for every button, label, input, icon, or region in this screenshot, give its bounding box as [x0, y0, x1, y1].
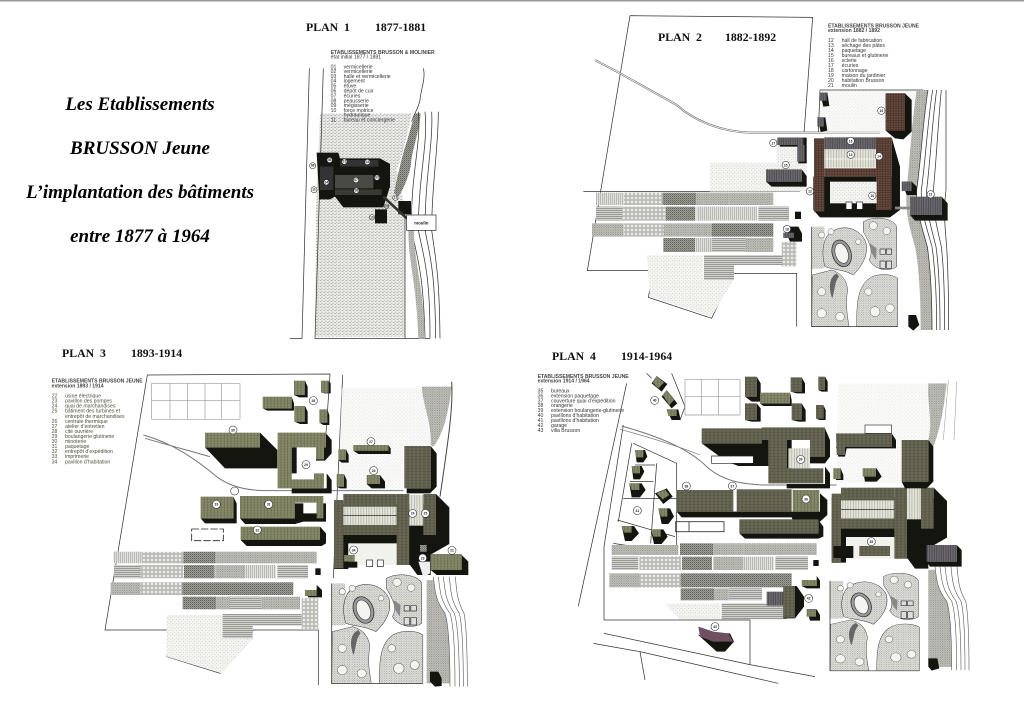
plan 3 buildings: [201, 381, 468, 687]
plan 2 legend: 14: [828, 48, 834, 54]
plan 4 housing pavilions: [622, 376, 681, 544]
plan 2 numbered markers: 21: [929, 193, 933, 197]
title: L’implantation des bâtiments: [25, 182, 254, 203]
plan 2 river and banks: [906, 90, 949, 330]
panel: plan 1 site map: [290, 50, 440, 338]
plan 3 main factory complex: [334, 494, 449, 575]
plan 4 numbered markers: 40: [653, 399, 657, 403]
plan 4 numbered markers: 38: [684, 484, 688, 488]
plan 4 numbered markers: 41: [635, 509, 639, 513]
plan 2 numbered markers: 12: [808, 190, 812, 194]
plan 3 legend: 34: [52, 459, 58, 465]
plan 4 legend: pavillons d’habitation: [551, 413, 599, 419]
plan 4 legend: 39: [538, 408, 544, 414]
plan 1 stippled ground: [315, 113, 412, 337]
plan 4 legend: extension 1914 / 1964: [538, 379, 590, 385]
plan 2 garden: [812, 218, 898, 327]
plan 4 main factory complex: [832, 488, 947, 569]
plan 2 legend: cartonnage: [842, 68, 868, 74]
plan 2 legend: 16: [828, 58, 834, 64]
plan 3 heading: PLAN 3: [62, 346, 106, 360]
plan 3 numbered markers: 26: [372, 469, 376, 473]
plan 4 south small shed: [928, 658, 939, 671]
plan 2 heading: PLAN 2: [658, 30, 702, 44]
panel: plan 4 site map: [538, 373, 969, 683]
plan 2 cultivated fields: [592, 193, 789, 280]
plan 1 heading: 1877-1881: [375, 20, 426, 34]
plan 2 legend: 21: [828, 83, 834, 89]
plan 4 heading: PLAN 4: [552, 349, 596, 363]
plan 1 numbered markers: 01: [342, 160, 346, 164]
plan 4 heading: [552, 349, 672, 363]
plan 1 legend: 05: [331, 84, 337, 90]
plan 4 stippled grounds: [665, 383, 933, 619]
plan 2 numbered markers: 14: [877, 155, 881, 159]
plan 4 numbered markers: 43: [713, 625, 717, 629]
plan 3 legend: pavillon d’habitation: [65, 459, 110, 465]
plan 1 legend: étuve: [344, 84, 356, 90]
plan 2 legend: scierie: [842, 58, 857, 64]
plan 2 numbered markers: 19: [879, 109, 883, 113]
plan 3 numbered markers: 22: [450, 549, 454, 553]
plan 4 legend: villa Brusson: [551, 428, 580, 434]
plan 1 legend: force motrice: [344, 108, 374, 114]
plan 1 heading: PLAN 1: [306, 20, 350, 34]
panel: plan 3 site map: [52, 374, 468, 687]
plan 1 legend: dépôt de cuir: [344, 89, 374, 95]
plan 3 legend: paquetage: [65, 444, 90, 450]
plan 1 legend: 02: [331, 69, 337, 75]
plan 4 legend: [538, 374, 629, 434]
plan 3 legend: 25: [52, 409, 58, 415]
plan 3 legend: quai de marchandises: [65, 404, 116, 410]
plan 2 legend: 19: [828, 73, 834, 79]
plan 1 legend: 11: [331, 118, 336, 124]
plan 3 heading: [62, 346, 182, 360]
plan 3 legend: 29: [52, 434, 58, 440]
plan 3 stippled grounds: [167, 388, 432, 673]
plan 3 numbered markers: 33: [214, 503, 218, 507]
plan 3 numbered markers: 25: [423, 512, 427, 516]
panel: plan 2 site map: [583, 16, 949, 331]
plan 3 legend: 31: [52, 444, 58, 450]
plan 4 legend: 37: [538, 398, 544, 404]
plan 3 numbered markers: 30: [231, 428, 235, 432]
plan 2 main factory complex: [813, 137, 900, 217]
plan 3 legend: 32: [52, 449, 58, 455]
plan 1 legend: peausserie: [344, 98, 369, 104]
plan 1 legend: vermicellerie: [344, 69, 373, 75]
plan 3 legend: usine électrique: [65, 394, 101, 400]
plan 2 road: [595, 60, 880, 133]
plan 4 legend: pavillons d’habitation: [551, 418, 599, 424]
plan 1 legend: 10: [331, 108, 337, 114]
plan 1 heading: [306, 20, 426, 34]
plan 2 legend: maison du jardinier: [842, 73, 886, 79]
plan 4 legend: extension boulangerie-glutinerie: [551, 408, 624, 414]
plan 2 legend: 17: [828, 63, 834, 69]
plan 4 numbered markers: [633, 396, 875, 631]
plan 1 conduit to mill: [383, 197, 407, 218]
plan 2 legend: 15: [828, 53, 834, 59]
plan 2 legend: habitation Brusson: [842, 78, 885, 84]
plan 3 numbered markers: [212, 397, 456, 562]
plan 4 numbered markers: 35: [869, 540, 873, 544]
plan 1 numbered markers: 02: [365, 160, 369, 164]
title: BRUSSON Jeune: [69, 138, 211, 159]
plan 2 legend: moulin: [842, 83, 857, 89]
plan 3 legend: atelier d’entretien: [65, 424, 105, 430]
plan 3 heading: 1893-1914: [131, 346, 182, 360]
moulin label box: moulin: [414, 220, 429, 225]
plan 3 garden: [332, 575, 423, 683]
plan 2 heading: 1882-1892: [725, 30, 776, 44]
plan 2 legend: 18: [828, 68, 834, 74]
plan 1 legend: 03: [331, 74, 337, 80]
plan 1 legend: écuries: [344, 93, 361, 99]
plan 4 legend: 40: [538, 413, 544, 419]
plan 4 numbered markers: 39: [799, 458, 803, 462]
plan 4 legend: 38: [538, 403, 544, 409]
plan 3 numbered markers: 28: [311, 399, 315, 403]
plan 2 legend: 20: [828, 78, 834, 84]
plan 2 legend: paquetage: [842, 48, 866, 54]
plan 1 numbered markers: 05: [328, 158, 332, 162]
plan 4 garage and south buildings: [767, 560, 820, 621]
plan 4 upper grid: [685, 379, 740, 415]
moulin label box: [407, 215, 436, 230]
plan 4 numbered markers: 37: [730, 484, 734, 488]
plan 3 cultivated fields: [111, 552, 317, 638]
plan 3 legend: 30: [52, 439, 58, 445]
plan 1 legend: 08: [331, 98, 337, 104]
plan 4 garden: [830, 573, 919, 671]
plan 2 legend: 13: [828, 43, 834, 49]
plan 2 heading: [658, 30, 776, 44]
plan 1 legend: 07: [331, 93, 337, 99]
plan 1 numbered markers: 08: [354, 189, 358, 193]
plan 1 river: [394, 68, 440, 338]
plan 3 upper bank vegetation: [422, 382, 452, 497]
plan 3 legend: centrale thermique: [65, 419, 108, 425]
plan 1 legend: hydraulique: [344, 113, 370, 119]
plan 4 legend: 42: [538, 423, 544, 429]
plan 3 boundary lines: [105, 374, 343, 685]
plan 1 numbered markers: [310, 157, 398, 220]
plan 3 legend: extension 1893 / 1914: [52, 384, 104, 390]
plan 3 legend: minoterie: [65, 439, 86, 445]
top edge line: [0, 0, 1024, 2]
plan 4 legend: orangerie: [551, 403, 573, 409]
plan 1 legend: 04: [331, 79, 337, 85]
plan 4 heading: 1914-1964: [621, 349, 672, 363]
plan 4 legend: 43: [538, 428, 544, 434]
plan 3 legend: 23: [52, 399, 58, 405]
title: entre 1877 à 1964: [70, 226, 210, 247]
plan 1 small buildings: [375, 201, 411, 223]
plan 3 dashed plot: [192, 529, 223, 541]
plan 3 numbered markers: 34: [352, 548, 356, 552]
plan 2 legend: ETABLISSEMENTS BRUSSON JEUNE: [828, 23, 920, 29]
plan 2 legend: hall de fabrication: [842, 38, 882, 44]
plan 1 numbered markers: 11: [312, 188, 316, 192]
plan 3 legend: pavillon des pompes: [65, 399, 112, 405]
plan 3 legend: entrepôt de marchandises: [65, 414, 125, 420]
plan 3 road: [143, 435, 403, 491]
plan 4 legend: 41: [538, 418, 544, 424]
plan 4 road: [622, 426, 837, 485]
plan 3 legend: bâtiment des turbines et: [65, 409, 121, 415]
plan 2 other buildings: [766, 93, 948, 331]
plan 3 numbered markers: 29: [304, 463, 308, 467]
plan 1 legend: vermicellerie: [344, 64, 373, 70]
plan 1 legend: état initial 1877 / 1881: [331, 55, 381, 61]
plan 1 legend: 01: [331, 64, 337, 70]
plan 3 legend: boulangerie glutinerie: [65, 434, 114, 440]
plan 4 upper bank and faint water lines: [928, 380, 957, 450]
plan 4 numbered markers: 42: [807, 597, 811, 601]
plan 4 upper workshop group: [745, 377, 828, 422]
plan 2 legend: bureaux et glutinerie: [842, 53, 889, 59]
plan 1 legend: [331, 50, 435, 124]
plan 2 numbered markers: 18: [785, 227, 789, 231]
plan 1 legend: ETABLISSEMENTS BRUSSON & MOLINIER: [331, 50, 435, 56]
plan 1 legend: halle et vermicellerie: [344, 74, 391, 80]
plan 4 legend: 35: [538, 388, 544, 394]
title: Les Etablissements: [64, 94, 215, 115]
plan 3 legend: 24: [52, 404, 58, 410]
plan 3 upper grid: [152, 383, 240, 419]
plan 4 industrial buildings: [676, 425, 962, 567]
plan 4 legend: extension paquetage: [551, 393, 599, 399]
plan 4 boundary lines: [578, 373, 815, 683]
plan 2 boundary lines: [583, 16, 923, 327]
plan 3 numbered markers: 32: [255, 528, 259, 532]
plan 1 boundary lines: [290, 68, 430, 338]
plan 4 cultivated fields: [609, 543, 817, 619]
plan 1 legend: mégisserie: [344, 103, 369, 109]
plan 3 legend: ETABLISSEMENTS BRUSSON JEUNE: [52, 379, 143, 385]
plan 2 legend: 12: [828, 38, 834, 44]
plan 2 numbered markers: 17: [771, 141, 775, 145]
plan 3 numbered markers: 24: [411, 512, 415, 516]
plan 1 numbered markers: 07: [354, 178, 358, 182]
plan 1 numbered markers: 03: [375, 176, 379, 180]
plan 1 legend: bureau et conciergerie: [344, 118, 395, 124]
plan 1 legend: 06: [331, 89, 337, 95]
plan 2 numbered markers: 13: [849, 153, 853, 157]
plan 3 legend: cité ouvrière: [65, 429, 93, 435]
plan 1 numbered markers: 10: [370, 215, 374, 219]
plan 3 legend: 22: [52, 394, 58, 400]
plan 1 numbered markers: 04: [324, 180, 328, 184]
plan 2 numbered markers: 16: [849, 139, 853, 143]
plan 3 legend: 26: [52, 419, 58, 425]
plan 4 river and banks: [928, 567, 969, 670]
plan 2 legend: [828, 23, 920, 89]
plan 3 legend: entrepôt d’expédition: [65, 449, 113, 455]
plan 1 numbered markers: 09: [385, 204, 389, 208]
plan 3 legend: 27: [52, 424, 58, 430]
plan 4 legend: garage: [551, 423, 567, 429]
plan 3 legend: 28: [52, 429, 58, 435]
plan 4 legend: 36: [538, 393, 544, 399]
plan 1 legend: logement: [344, 79, 365, 85]
plan 2 legend: écuries: [842, 63, 859, 69]
plan 3 legend: [52, 379, 143, 465]
plan 4 villa Brusson: [698, 627, 734, 652]
plan 1 numbered markers: 06: [311, 164, 315, 168]
plan 2 numbered markers: 15: [784, 163, 788, 167]
plan 2 numbered markers: 20: [870, 194, 874, 198]
plan 4 numbered markers: 36: [804, 497, 808, 501]
plan 2 legend: extension 1882 / 1892: [828, 28, 880, 34]
plan 1 legend: 09: [331, 103, 337, 109]
plan 2 legend: séchage des pâtes: [842, 43, 885, 49]
plan 3 numbered markers: 31: [267, 503, 271, 507]
plan 4 legend: couverture quai d’expédition: [551, 398, 616, 404]
plan 1 factory building: [317, 153, 390, 207]
plan 2 numbered markers: [770, 107, 934, 233]
plan 3 legend: imprimerie: [65, 454, 89, 460]
plan 4 legend: ETABLISSEMENTS BRUSSON JEUNE: [538, 374, 629, 380]
plan 3 river and banks: [427, 577, 467, 687]
plan 3 legend: 33: [52, 454, 58, 460]
plan 3 numbered markers: 23: [421, 556, 425, 560]
title: [25, 94, 254, 247]
plan 2 stippled grounds: [647, 91, 920, 317]
plan 3 numbered markers: 27: [369, 440, 373, 444]
plan 4 legend: bureaux: [551, 388, 570, 394]
plan 1 numbered markers: 12: [393, 196, 397, 200]
